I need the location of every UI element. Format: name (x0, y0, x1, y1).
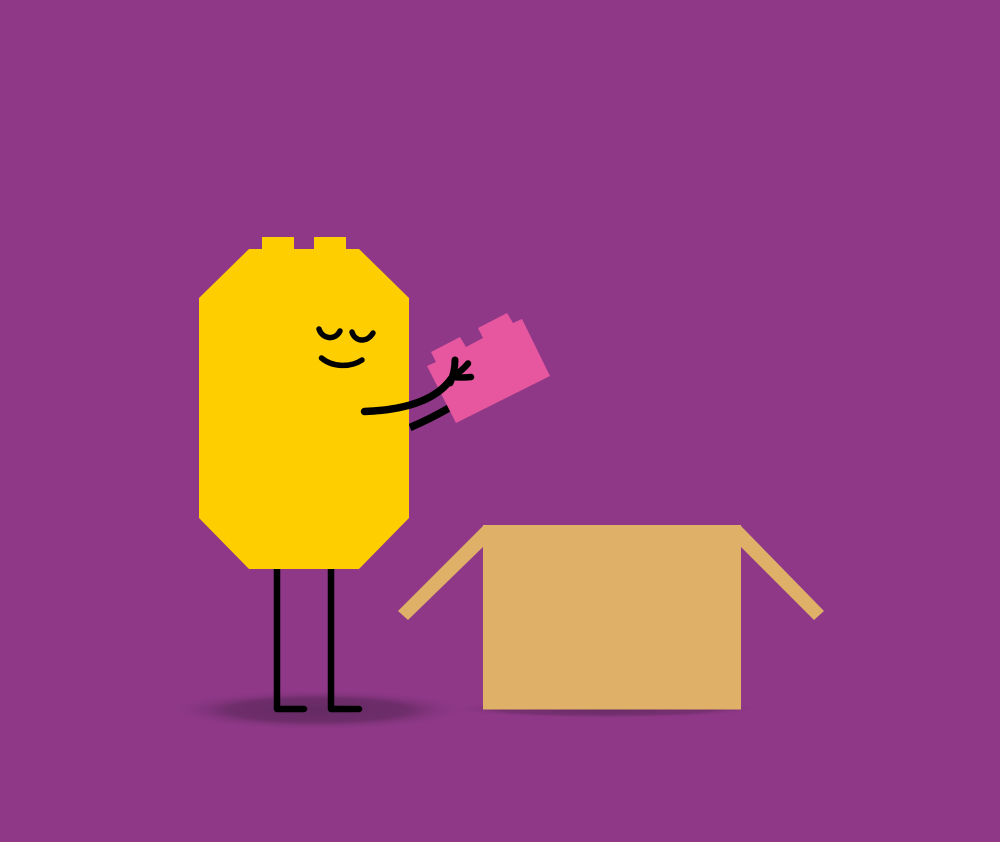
mouth (322, 358, 362, 365)
character body (199, 237, 409, 569)
box shadow (452, 700, 760, 718)
face (319, 329, 373, 365)
upper arm and hand (364, 360, 471, 412)
cardboard box (398, 525, 824, 710)
box front (483, 525, 741, 710)
character shadow (168, 690, 468, 730)
lower arm (410, 408, 449, 428)
left eye (319, 329, 340, 338)
pink brick (427, 313, 550, 423)
character legs (277, 568, 359, 709)
left flap (398, 525, 484, 620)
right flap (740, 525, 824, 620)
right eye (352, 332, 373, 340)
